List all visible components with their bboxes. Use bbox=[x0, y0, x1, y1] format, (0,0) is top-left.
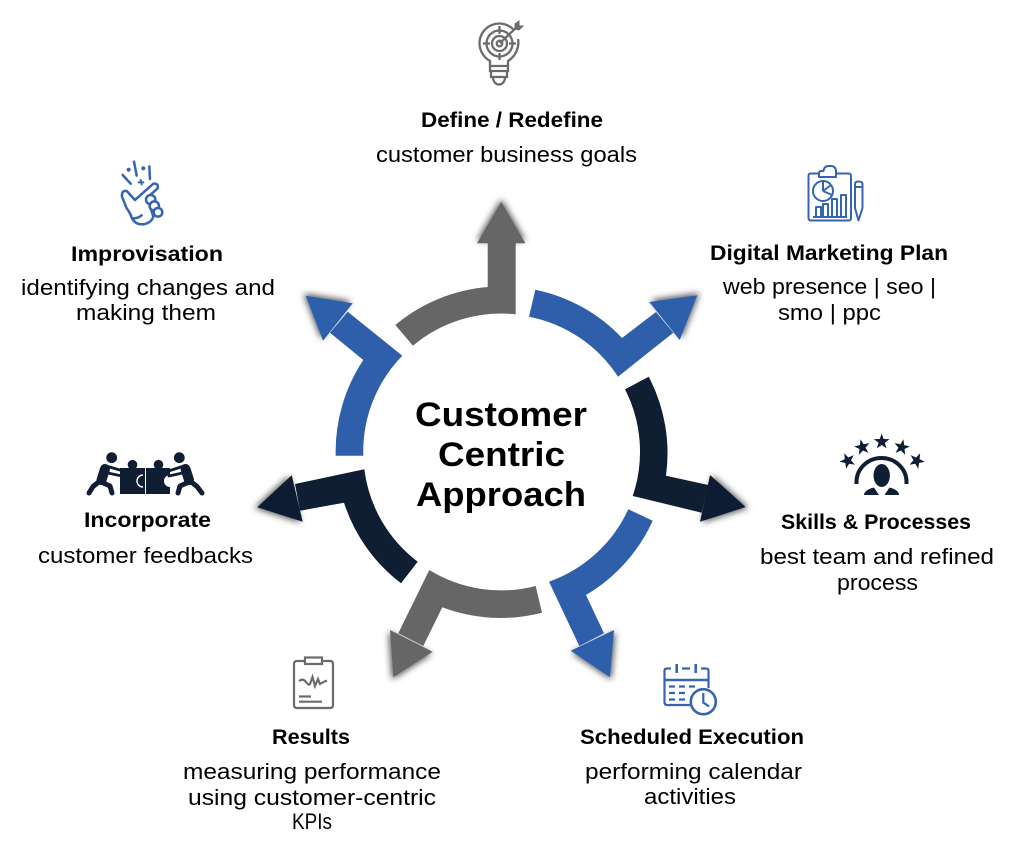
panel: skills and processes bbox=[760, 433, 994, 595]
description: results: using customer-centric bbox=[188, 785, 436, 810]
description: results: measuring performance bbox=[183, 759, 441, 784]
arrow: results (grey, lower left) bbox=[390, 570, 542, 677]
arrow: skills and processes (navy, right) bbox=[625, 377, 746, 522]
description: digital marketing plan: smo | ppc bbox=[778, 300, 881, 325]
heading: digital marketing plan: Digital Marketing Plan bbox=[710, 241, 948, 265]
heading: define / redefine: Define / Redefine bbox=[421, 108, 603, 132]
description: define / redefine: customer business goals bbox=[376, 142, 637, 167]
center title bbox=[415, 396, 587, 514]
arrow: improvisation (blue, upper left) bbox=[306, 296, 402, 456]
icon: snapping fingers bbox=[122, 162, 162, 224]
heading: incorporate: Incorporate bbox=[84, 508, 211, 532]
icon: clipboard with charts and pencil bbox=[808, 166, 862, 220]
icon: clipboard with pulse line bbox=[294, 658, 333, 708]
heading: results: Results bbox=[272, 725, 350, 749]
heading: scheduled execution: Scheduled Execution bbox=[580, 725, 804, 749]
description: improvisation: making them bbox=[76, 300, 216, 325]
description: scheduled execution bbox=[585, 759, 802, 809]
arrow: incorporate (navy, left) bbox=[257, 469, 418, 583]
center title: Centric bbox=[438, 436, 565, 474]
panel: incorporate bbox=[38, 452, 253, 568]
description: results: KPIs bbox=[292, 809, 332, 834]
icon: light bulb with target bbox=[480, 21, 523, 84]
description: digital marketing plan: web presence | seo | bbox=[722, 274, 936, 299]
icon: people joining puzzle pieces bbox=[89, 452, 202, 494]
heading: skills and processes: Skills & Processes bbox=[781, 510, 971, 534]
description: skills and processes bbox=[760, 544, 994, 595]
panel: digital marketing plan bbox=[710, 166, 948, 325]
center title: Approach bbox=[416, 476, 586, 514]
description: incorporate: customer feedbacks bbox=[38, 543, 253, 568]
description: scheduled execution: activities bbox=[644, 784, 736, 809]
icon: calendar with clock bbox=[664, 664, 716, 714]
icon: person under arch of stars bbox=[837, 433, 927, 495]
description: digital marketing plan bbox=[722, 274, 936, 325]
description: improvisation bbox=[21, 275, 275, 325]
description: skills and processes: process bbox=[837, 570, 918, 595]
panel: results bbox=[183, 658, 441, 834]
arrow: define (grey, up) bbox=[395, 202, 525, 346]
panel: improvisation bbox=[21, 162, 275, 325]
panel: scheduled execution bbox=[580, 664, 804, 809]
panel: define / redefine bbox=[376, 21, 637, 167]
arrow: digital marketing plan (blue, upper right) bbox=[529, 290, 697, 377]
description: results bbox=[183, 759, 441, 834]
heading: improvisation: Improvisation bbox=[71, 242, 223, 266]
description: skills and processes: best team and refined bbox=[760, 544, 994, 569]
description: improvisation: identifying changes and bbox=[21, 275, 275, 300]
description: scheduled execution: performing calendar bbox=[585, 759, 802, 784]
arrow: scheduled execution (blue, lower right) bbox=[549, 509, 653, 677]
center title: Customer bbox=[415, 396, 587, 434]
